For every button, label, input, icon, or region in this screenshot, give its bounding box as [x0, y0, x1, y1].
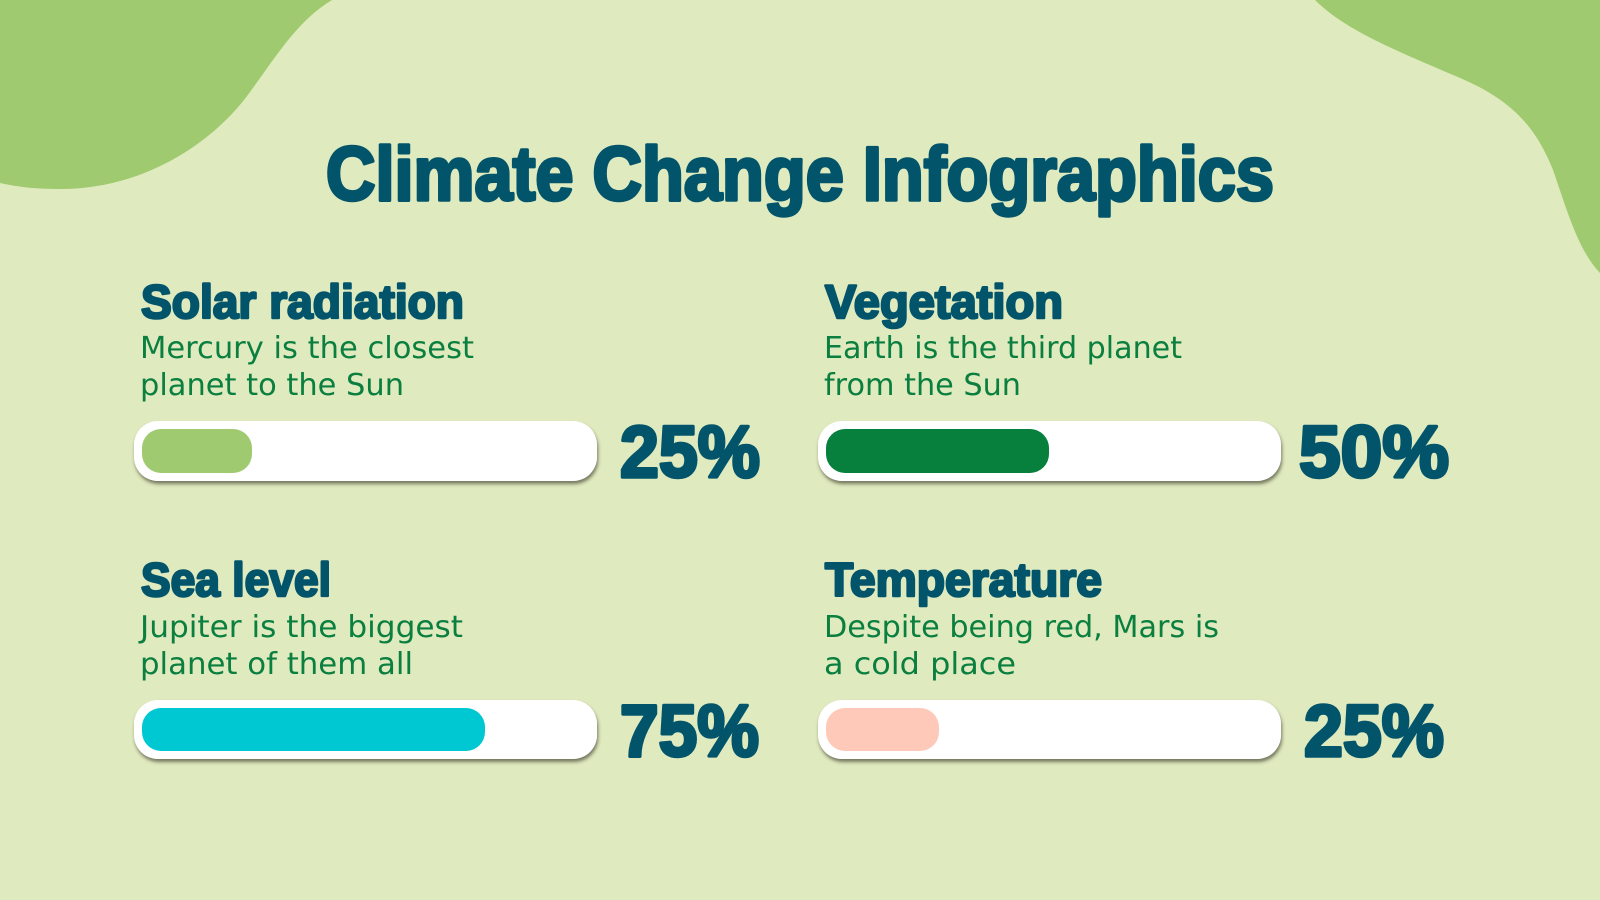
progress bar: 25% [134, 421, 597, 481]
description: vegetation: Earth is the third planet [824, 331, 1182, 366]
heading: vegetation: Vegetation [825, 275, 1063, 328]
description: sea level: planet of them all [140, 647, 413, 682]
progress bar: 25% [818, 700, 1281, 759]
panel: temperature [818, 553, 1444, 772]
title: Climate Change Infographics [326, 132, 1274, 217]
description: solar radiation: planet to the Sun [140, 368, 404, 403]
value: 50%: 50% [1299, 412, 1449, 493]
value: 25%: 25% [620, 412, 760, 493]
heading: sea level: Sea level [141, 553, 331, 606]
value: 25%: 25% [1304, 691, 1444, 772]
panel: solar radiation [134, 275, 760, 493]
description: temperature: Despite being red, Mars is [824, 610, 1219, 645]
description: sea level: Jupiter is the biggest [138, 610, 463, 645]
panel: vegetation [818, 275, 1449, 493]
description: vegetation: from the Sun [824, 368, 1021, 403]
progress bar: 50% [818, 421, 1281, 481]
blob: top right [1315, 0, 1600, 273]
progress bar: 75% [134, 700, 597, 759]
value: 75%: 75% [620, 691, 759, 772]
description: temperature: a cold place [824, 647, 1016, 682]
panel: sea level [134, 553, 759, 772]
heading: solar radiation: Solar radiation [141, 275, 464, 328]
blob: top left [0, 0, 332, 189]
heading: temperature: Temperature [825, 553, 1102, 606]
description: solar radiation: Mercury is the closest [140, 331, 474, 366]
